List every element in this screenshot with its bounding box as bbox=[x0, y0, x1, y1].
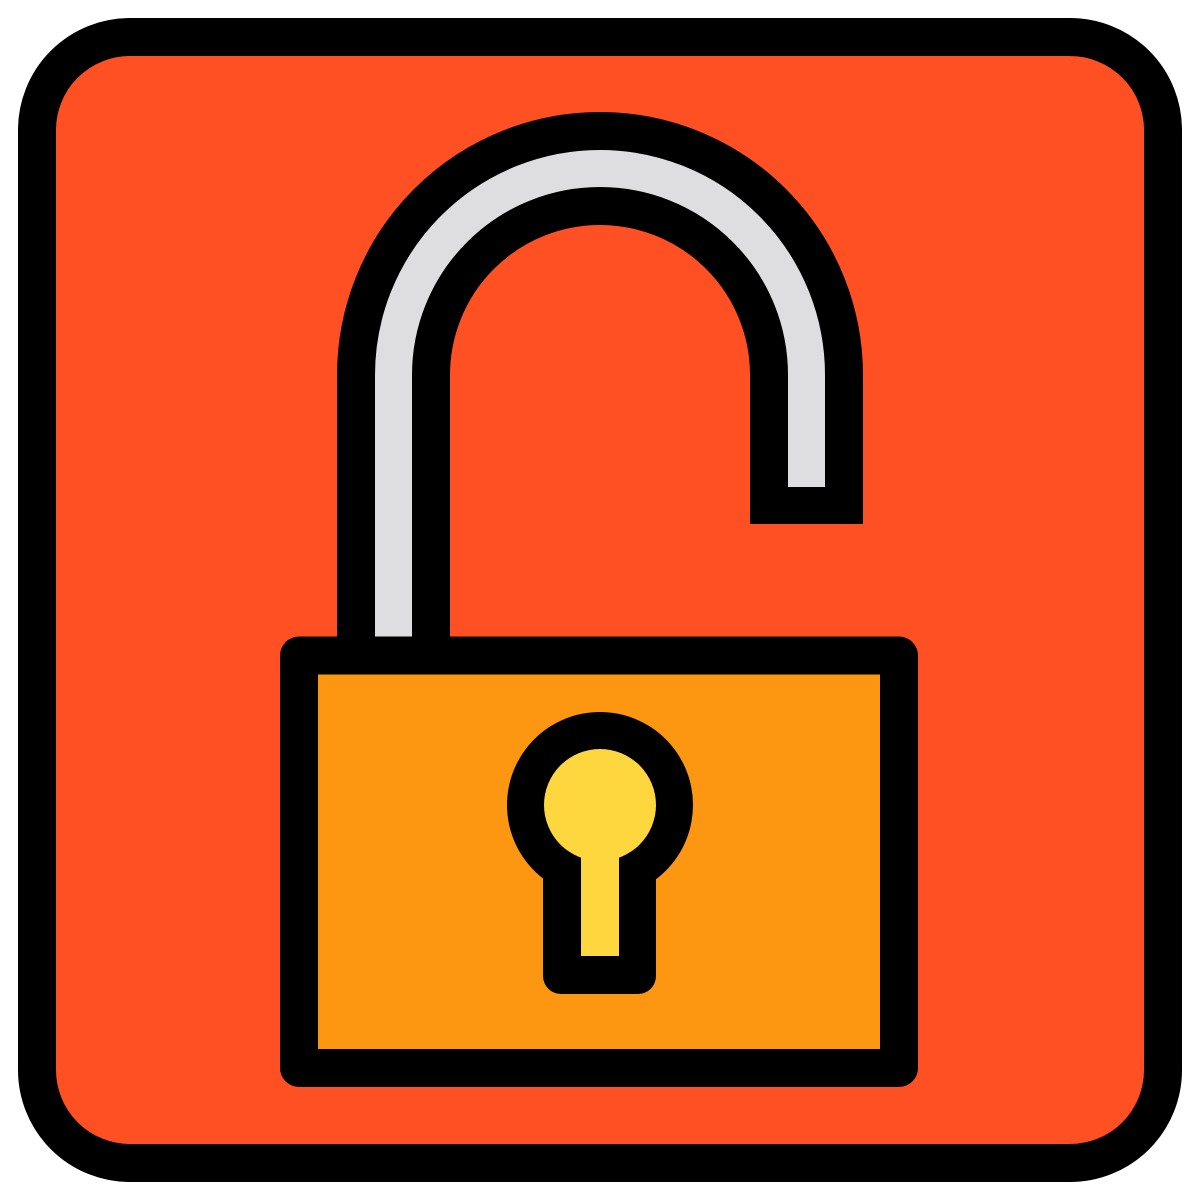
icon: lock body bbox=[299, 656, 899, 1068]
icon: keyhole bbox=[507, 712, 693, 994]
icon: shackle bbox=[394, 169, 806, 660]
